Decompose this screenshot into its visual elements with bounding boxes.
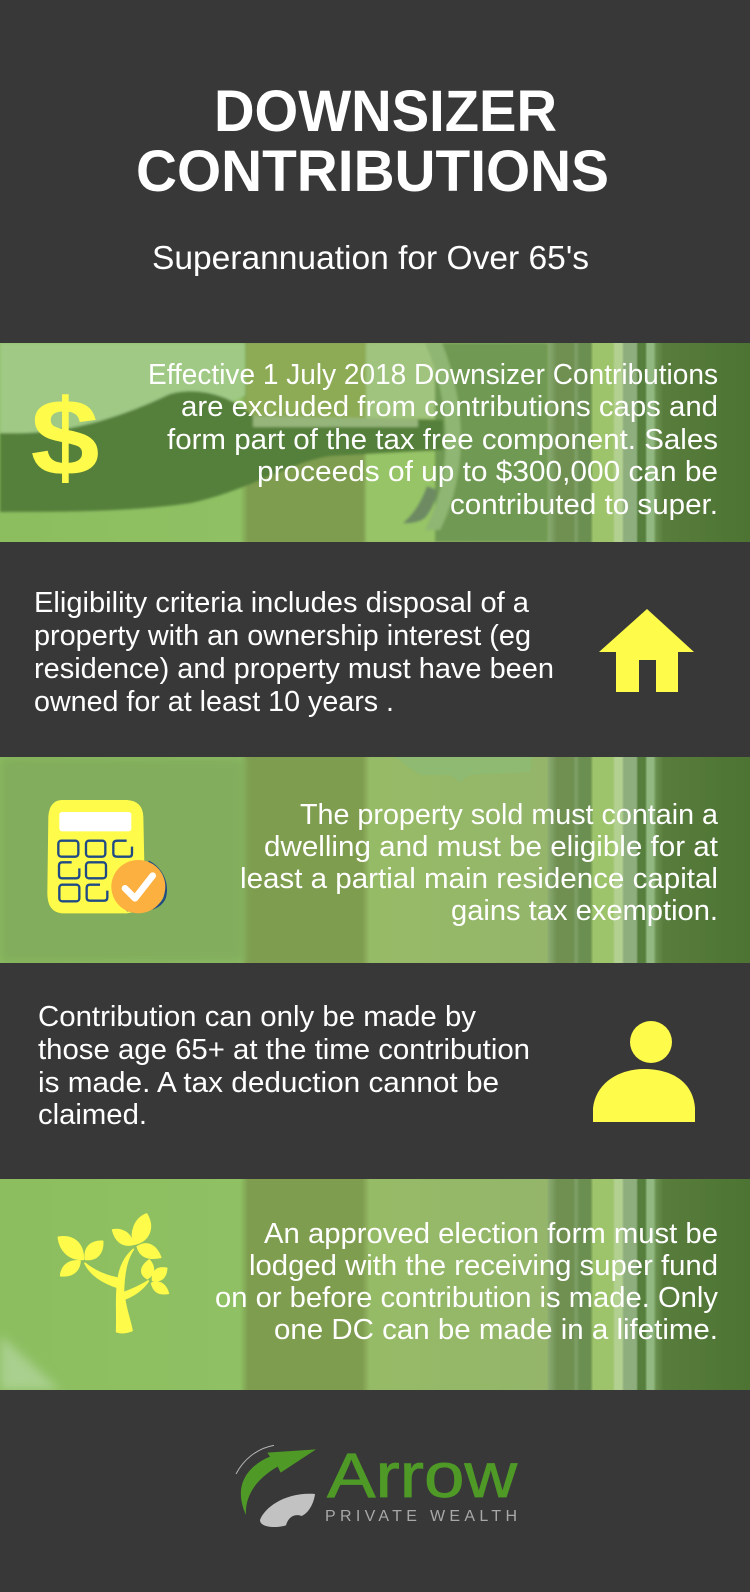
text: property requirement: dwelling and must be eligible for at [264, 831, 718, 863]
text: effective date: contributed to super. [450, 489, 718, 521]
logo icon [236, 1445, 316, 1527]
text: effective date: Effective 1 July 2018 Downsizer Contributions [148, 359, 718, 391]
text: property requirement: least a partial main residence capital [240, 863, 718, 895]
text: election form: An approved election form must be [264, 1218, 718, 1250]
bottle shape [0, 391, 443, 512]
text: election form: lodged with the receiving super fund [249, 1250, 718, 1282]
text: eligibility criteria [34, 587, 554, 718]
text: effective date: proceeds of up to $300,000 can be [257, 456, 718, 488]
logo tagline: PRIVATE WEALTH [325, 1508, 517, 1525]
text: eligibility criteria: owned for at least 10 years . [34, 686, 394, 718]
panel: effective date [0, 343, 750, 542]
title [136, 79, 609, 204]
panel: election form [0, 1179, 750, 1390]
text: property requirement [240, 799, 719, 927]
text: eligibility criteria: property with an ownership interest (eg [34, 620, 531, 652]
text: age requirement: Contribution can only be made by [38, 1001, 477, 1033]
icon: calculator [47, 800, 166, 913]
text: election form [215, 1218, 718, 1346]
icon: dollar sign: $ [30, 376, 100, 498]
text: age requirement: is made. A tax deduction cannot be [38, 1067, 499, 1099]
text: effective date: form part of the tax free component. Sales [167, 424, 718, 456]
panel: property requirement [0, 757, 750, 963]
text: age requirement [38, 1001, 530, 1131]
text: effective date [148, 359, 718, 521]
icon: check badge [111, 860, 166, 913]
title: DOWNSIZER [214, 79, 557, 144]
text: eligibility criteria: residence) and property must have been [34, 653, 554, 685]
logo wordmark: Arrow [327, 1441, 518, 1511]
text: eligibility criteria: Eligibility criteria includes disposal of a [34, 587, 530, 619]
text: effective date: are excluded from contributions caps and [181, 391, 718, 423]
icon: house [599, 609, 694, 692]
text: election form: one DC can be made in a lifetime. [274, 1314, 718, 1346]
icon: tree [58, 1214, 168, 1333]
text: age requirement: those age 65+ at the time contribution [38, 1034, 530, 1066]
text: election form: on or before contribution is made. Only [215, 1282, 718, 1314]
icon: person [593, 1021, 695, 1122]
title: CONTRIBUTIONS [136, 139, 609, 204]
text: property requirement: The property sold must contain a [300, 799, 719, 831]
text: age requirement: claimed. [38, 1099, 147, 1131]
text: property requirement: gains tax exemption. [451, 895, 718, 927]
subtitle: Superannuation for Over 65's [152, 239, 589, 276]
logo: Arrow Private Wealth [236, 1441, 518, 1527]
